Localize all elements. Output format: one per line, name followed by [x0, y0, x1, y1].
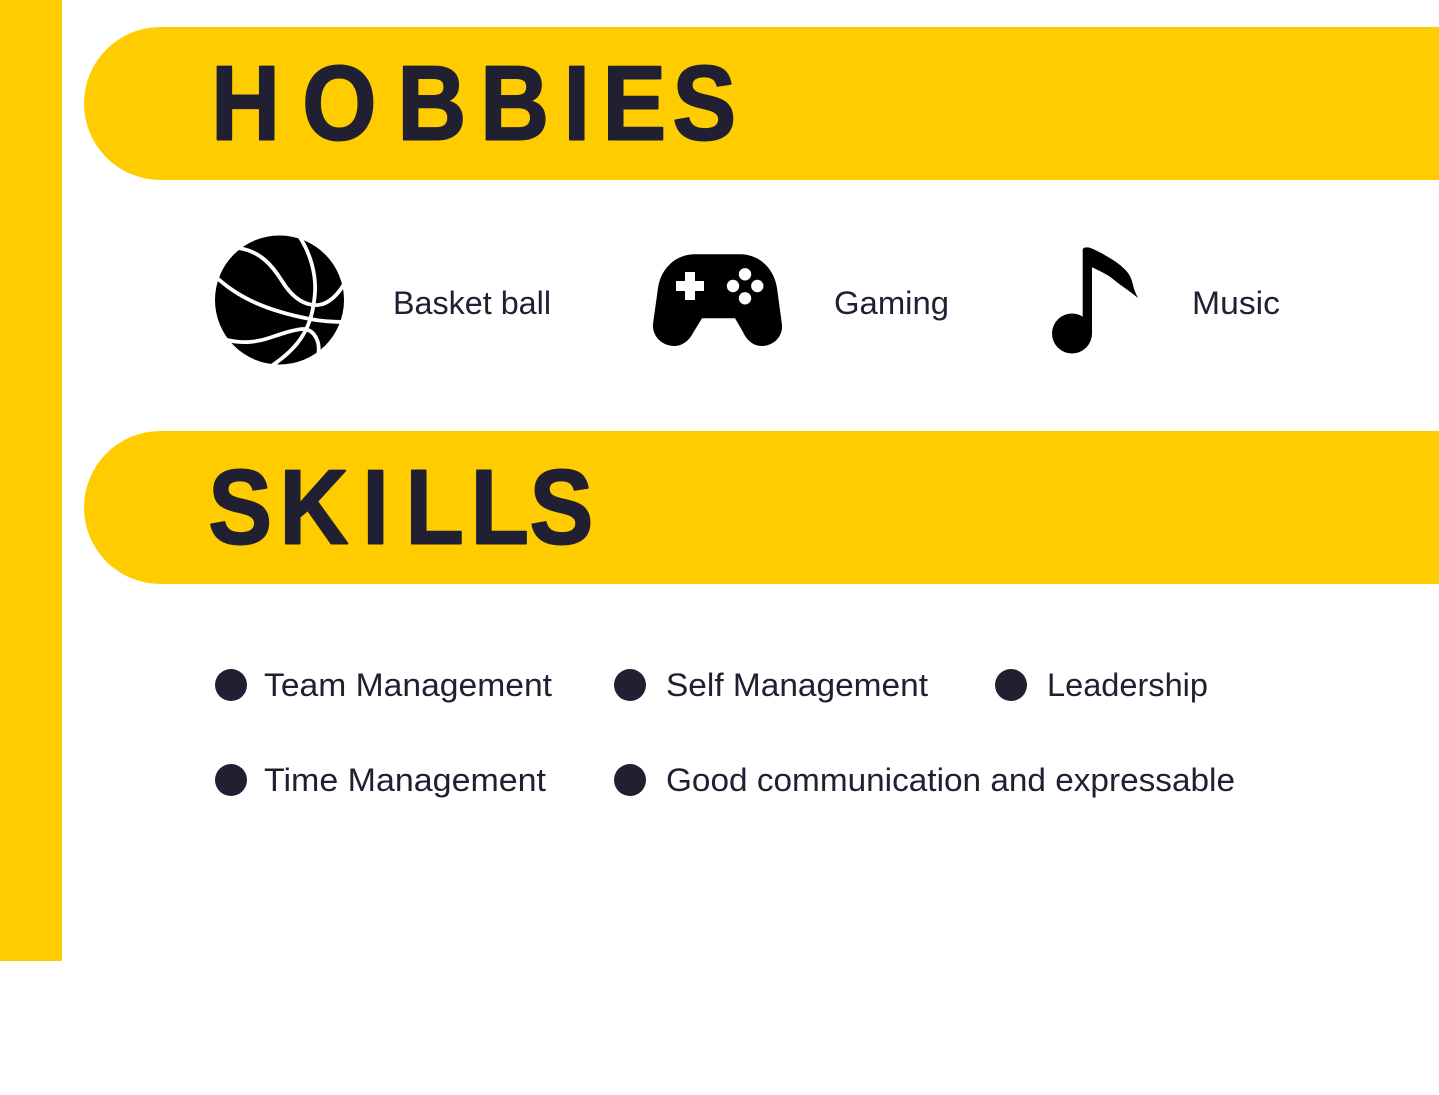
label: music: Music — [1192, 285, 1280, 321]
skill: time management: Time Management — [264, 762, 546, 798]
heading: hobbies: HOBBIES — [211, 45, 736, 163]
skill: leadership: Leadership — [1047, 667, 1208, 703]
label: gaming: Gaming — [834, 285, 949, 321]
skill: team management: Team Management — [264, 667, 552, 703]
skill: good communication: Good communication and expressable — [666, 762, 1235, 798]
skill: self management: Self Management — [666, 667, 928, 703]
panel: hobbies banner — [84, 27, 1439, 180]
icon: music note — [1052, 247, 1138, 354]
panel: hobbies items — [215, 236, 1280, 367]
left vertical yellow bar — [0, 0, 62, 961]
heading: skills: SKILLS — [208, 449, 593, 566]
panel: skills banner — [84, 431, 1439, 584]
icon: basketball — [215, 236, 346, 367]
label: basket ball: Basket ball — [393, 285, 551, 321]
icon: game controller — [653, 254, 782, 346]
panel: skills list — [215, 667, 1235, 798]
